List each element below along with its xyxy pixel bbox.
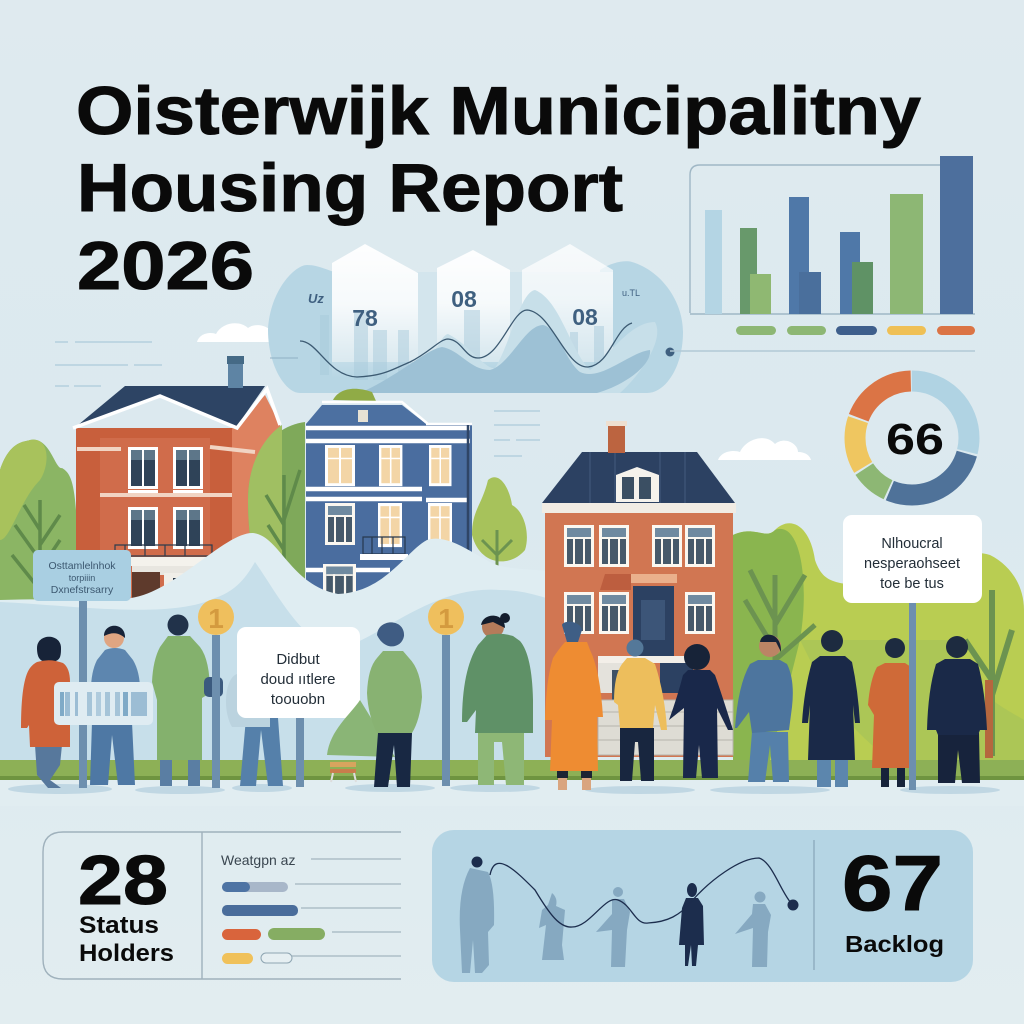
sign: right white: nesperaohseet xyxy=(864,556,960,572)
ground-floor openings xyxy=(132,572,160,600)
chimney xyxy=(608,424,625,453)
chart backdrop blob xyxy=(268,261,683,393)
roof xyxy=(542,452,735,503)
stat: 67: 67 xyxy=(842,839,943,927)
card: centre callout: toouobn xyxy=(271,691,325,708)
panel: wave city chart xyxy=(268,244,683,393)
pole: left sign xyxy=(79,598,87,788)
door xyxy=(633,586,674,656)
cloud right xyxy=(718,438,811,460)
stat: 28: 28 xyxy=(78,841,168,919)
dormer xyxy=(616,467,659,502)
large figure xyxy=(460,868,494,973)
panel: backlog xyxy=(432,830,973,982)
person 1: orange coat xyxy=(21,637,70,788)
pale mid-field xyxy=(332,272,613,362)
chart numbers: 08 xyxy=(451,286,477,312)
scene wave xyxy=(0,533,560,790)
chart numbers xyxy=(308,286,640,331)
sign: left blue: torpiiin xyxy=(69,573,95,583)
card: centre callout: Didbut xyxy=(276,651,321,668)
bars xyxy=(705,210,722,314)
pole: right sign xyxy=(909,600,916,790)
person 5: green with hat xyxy=(367,622,422,787)
translucent hex panels xyxy=(332,244,613,378)
stat label: Status xyxy=(79,912,159,939)
marker pole 1 xyxy=(198,599,234,788)
green bush and bench xyxy=(327,700,395,782)
tree left xyxy=(0,440,78,600)
balcony xyxy=(115,545,212,556)
sign: right white xyxy=(843,515,982,603)
person behind white card xyxy=(226,674,283,786)
hand behind pole xyxy=(204,677,223,697)
porch xyxy=(631,574,677,583)
windows xyxy=(128,447,158,489)
roof trim xyxy=(73,389,280,428)
person 9: navy dress xyxy=(669,644,733,778)
facade xyxy=(76,428,232,600)
lawn strip xyxy=(0,760,1024,806)
barcode card xyxy=(54,682,153,725)
roof xyxy=(306,405,426,424)
person 2: blue hoodie xyxy=(90,626,140,785)
mini legend heading: Weatgpn az xyxy=(221,852,295,868)
windows xyxy=(325,445,355,486)
red house xyxy=(73,356,280,601)
panel: status holders xyxy=(43,832,401,979)
ground shadows xyxy=(8,784,1000,794)
title: 2026 xyxy=(77,228,254,304)
marker pole 2: 1 xyxy=(438,603,454,634)
chart numbers: Uz xyxy=(308,291,324,306)
card: centre callout: doud ııtlere xyxy=(260,671,336,688)
bar chart xyxy=(690,156,975,335)
person 13: navy jacket xyxy=(927,636,987,783)
blue house xyxy=(306,402,472,600)
person 3: green coat xyxy=(152,614,210,786)
donut value: 66 xyxy=(886,415,944,464)
chart numbers: u.TL xyxy=(622,288,640,298)
navy figure xyxy=(679,883,704,966)
connector dot xyxy=(666,348,674,356)
legend pills xyxy=(736,326,776,335)
mini legend bars xyxy=(222,882,325,964)
chart numbers: 08 xyxy=(572,304,598,330)
person 12: orange coat xyxy=(868,638,911,787)
stat label line two: Holders xyxy=(79,940,174,967)
sign: right white: toe be tus xyxy=(880,576,944,592)
donut chart xyxy=(855,381,969,495)
decorative sky lines left xyxy=(55,342,540,456)
sign: left blue xyxy=(33,550,131,601)
windows xyxy=(564,525,594,567)
person 7: orange long coat xyxy=(545,622,603,790)
person 8: yellow hoodie xyxy=(614,640,667,781)
trend line xyxy=(300,310,632,377)
silhouettes with connecting wire xyxy=(460,856,798,973)
green hilltop behind blue house xyxy=(333,389,376,401)
cloud left xyxy=(197,323,292,342)
roof xyxy=(78,386,265,426)
steps xyxy=(598,700,733,755)
balcony xyxy=(363,537,405,554)
right background trees xyxy=(733,523,1024,760)
child figure xyxy=(539,893,565,960)
title: Housing Report xyxy=(77,150,623,226)
pale hill layer xyxy=(410,290,657,393)
right brick house xyxy=(542,421,736,757)
right figure xyxy=(735,892,771,967)
marker pole 1: 1 xyxy=(208,603,224,634)
marker pole 2 xyxy=(428,599,464,786)
tree right of blue house xyxy=(472,477,527,570)
title: Oisterwijk Municipalitny xyxy=(76,73,921,149)
deep hill layer xyxy=(360,325,650,393)
title xyxy=(76,73,921,304)
ledges xyxy=(77,447,255,495)
sign: right white: Nlhoucral xyxy=(881,536,943,552)
stat label: Backlog xyxy=(845,931,944,957)
white bands xyxy=(306,428,470,570)
skyline towers xyxy=(320,310,604,380)
person 6: green parka xyxy=(462,613,533,785)
tree between houses xyxy=(248,422,305,600)
chart numbers: 78 xyxy=(352,305,378,331)
person 11: navy long coat xyxy=(802,630,860,787)
card: centre callout xyxy=(237,627,360,718)
sign: left blue: Dxnefstrsarry xyxy=(51,584,114,596)
person 10: blue sweater xyxy=(735,635,793,782)
sign: left blue: Osttamlelnhok xyxy=(48,560,116,572)
reaching figure xyxy=(596,887,630,967)
chimney xyxy=(228,364,243,388)
